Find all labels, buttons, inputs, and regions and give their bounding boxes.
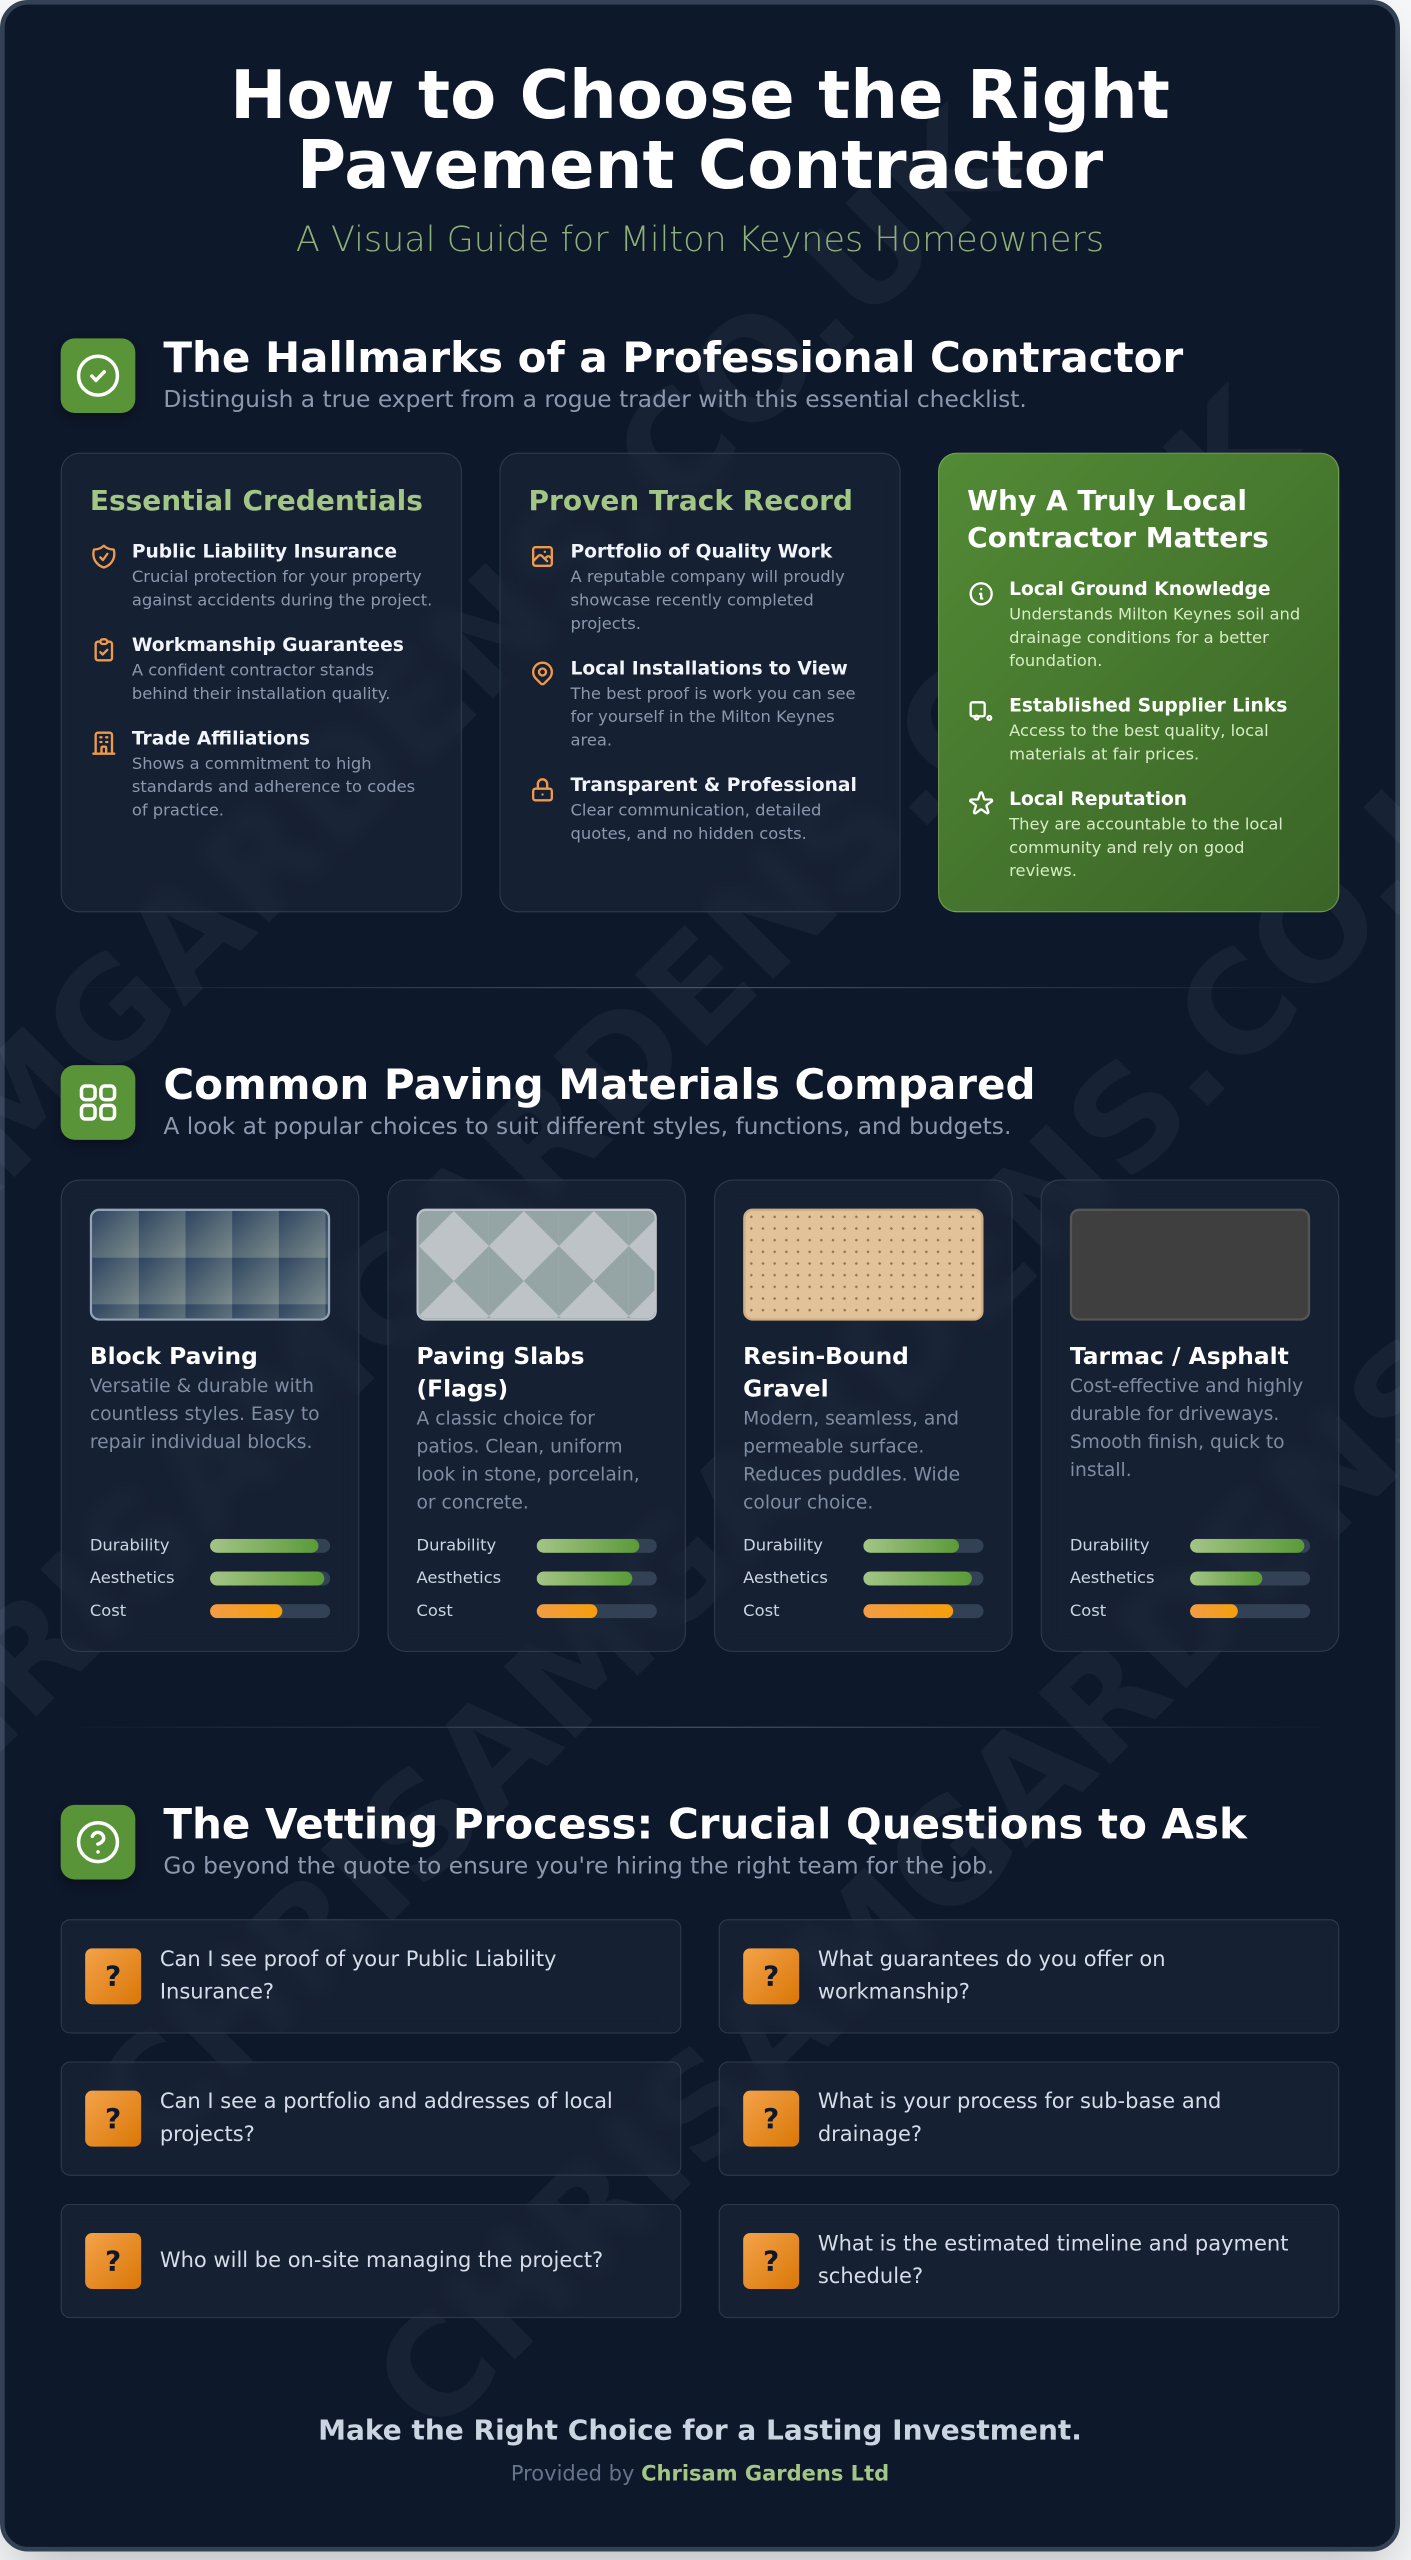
panel: proven track record bbox=[499, 453, 901, 912]
material name: Resin-Bound Gravel bbox=[743, 1342, 909, 1402]
section title text bbox=[163, 1801, 1248, 1879]
item: public liability insurance: Public Liability Insurance bbox=[132, 540, 397, 562]
question card 2: ? bbox=[763, 1960, 779, 1993]
item: transparent and professional: Transparent & Professional bbox=[571, 774, 857, 796]
rating bars bbox=[743, 1537, 984, 1621]
material description: Versatile & durable with countless styles. Easy to repair individual blocks. bbox=[90, 1374, 320, 1453]
rating bars: Aesthetics bbox=[417, 1569, 501, 1588]
rating bars: Aesthetics bbox=[1070, 1569, 1155, 1588]
rating bars: Cost bbox=[743, 1602, 779, 1621]
section title text: Common Paving Materials Compared bbox=[163, 1062, 1036, 1110]
section heading: materials bbox=[60, 1062, 1036, 1144]
swatch: paving slabs bbox=[417, 1209, 657, 1321]
item: local ground knowledge bbox=[970, 578, 1300, 671]
rating bars bbox=[1070, 1537, 1310, 1621]
rating bars: Aesthetics bbox=[743, 1569, 828, 1588]
item: trade affiliations bbox=[92, 727, 415, 820]
material name: Paving Slabs (Flags) bbox=[417, 1342, 585, 1402]
section title text: The Hallmarks of a Professional Contractor bbox=[163, 335, 1183, 383]
question card 2: What guarantees do you offer on workmanship? bbox=[818, 1947, 1166, 2004]
item: local installations to view bbox=[532, 657, 856, 750]
rating bars: Cost bbox=[90, 1602, 126, 1621]
rating bars: Cost bbox=[417, 1602, 453, 1621]
section heading: vetting process bbox=[60, 1801, 1248, 1883]
material name: Block Paving bbox=[90, 1342, 258, 1370]
section title text bbox=[163, 1062, 1036, 1139]
item: established supplier links bbox=[970, 694, 1287, 764]
swatch: block paving bbox=[90, 1209, 330, 1321]
question card 4: What is your process for sub-base and drainage? bbox=[818, 2090, 1221, 2147]
panel heading: Proven Track Record bbox=[529, 484, 853, 517]
item: workmanship guarantees: A confident contractor stands behind their installation quality. bbox=[132, 662, 390, 704]
item: transparent and professional bbox=[532, 774, 857, 844]
question card 5 bbox=[61, 2204, 681, 2318]
item: established supplier links: Access to the best quality, local materials at fair prices. bbox=[1009, 722, 1269, 764]
rating bars: Aesthetics bbox=[90, 1569, 175, 1588]
rating bars: Durability bbox=[1070, 1537, 1150, 1555]
item: trade affiliations: Shows a commitment to high standards and adherence to codes of practice. bbox=[132, 755, 415, 820]
rating bars: Cost bbox=[1070, 1602, 1106, 1621]
title: How to Choose the Right bbox=[230, 56, 1170, 134]
rating bars bbox=[416, 1537, 657, 1621]
question card 3: Can I see a portfolio and addresses of local projects? bbox=[160, 2090, 613, 2147]
section title text bbox=[163, 335, 1184, 412]
panel: tarmac asphalt bbox=[1041, 1180, 1339, 1652]
rating bars: Durability bbox=[90, 1537, 170, 1555]
item: local ground knowledge: Understands Milton Keynes soil and drainage conditions for a better foundation. bbox=[1009, 606, 1300, 671]
question card 6: ? bbox=[763, 2245, 779, 2277]
item: local installations to view: The best proof is work you can see for yourself in the Milton Keynes area. bbox=[571, 685, 856, 750]
item: portfolio of quality work bbox=[532, 540, 845, 634]
question card 6 bbox=[719, 2204, 1339, 2318]
panel: why a truly local contractor matters bbox=[938, 453, 1339, 912]
question card 1: ? bbox=[105, 1960, 121, 1993]
title: Pavement Contractor bbox=[297, 126, 1103, 204]
question card 3 bbox=[61, 2062, 681, 2176]
rating bars bbox=[90, 1537, 330, 1621]
swatch: resin-bound gravel bbox=[743, 1209, 984, 1321]
section heading: hallmarks bbox=[60, 335, 1184, 416]
footer headline: Make the Right Choice for a Lasting Investment. bbox=[318, 2414, 1082, 2447]
section title text: The Vetting Process: Crucial Questions to Ask bbox=[163, 1801, 1247, 1849]
footer credit: Provided by Chrisam Gardens Ltd bbox=[511, 2462, 889, 2486]
item: workmanship guarantees: Workmanship Guarantees bbox=[132, 634, 404, 656]
question card 4: ? bbox=[763, 2102, 779, 2135]
question card 5: ? bbox=[105, 2245, 121, 2277]
material description: A classic choice for patios. Clean, uniform look in stone, porcelain, or concrete. bbox=[417, 1407, 640, 1513]
item: public liability insurance bbox=[92, 540, 432, 610]
panel: block paving bbox=[61, 1180, 359, 1652]
panel heading: Why A Truly Local Contractor Matters bbox=[967, 484, 1269, 554]
section title text: A look at popular choices to suit different styles, functions, and budgets. bbox=[163, 1111, 1011, 1139]
item: local installations to view: Local Installations to View bbox=[571, 657, 848, 679]
question card 6: What is the estimated timeline and payment schedule? bbox=[818, 2232, 1288, 2289]
icon: check circle bbox=[61, 338, 135, 413]
question card 5: Who will be on-site managing the project? bbox=[160, 2248, 603, 2273]
item: portfolio of quality work: Portfolio of Quality Work bbox=[571, 540, 832, 562]
rating bars: Durability bbox=[743, 1537, 823, 1555]
title bbox=[230, 56, 1170, 204]
question card 1 bbox=[61, 1919, 681, 2034]
icon: question circle bbox=[61, 1805, 135, 1880]
panel heading: Essential Credentials bbox=[90, 484, 423, 517]
item: portfolio of quality work: A reputable company will proudly showcase recently completed projects. bbox=[571, 568, 845, 634]
material description: Modern, seamless, and permeable surface. Reduces puddles. Wide colour choice. bbox=[743, 1407, 960, 1513]
item: local reputation: They are accountable to the local community and rely on good reviews. bbox=[1009, 816, 1283, 881]
panel: essential credentials bbox=[61, 453, 462, 912]
question card 3: ? bbox=[105, 2102, 121, 2135]
section title text: Distinguish a true expert from a rogue trader with this essential checklist. bbox=[163, 384, 1027, 412]
panel: resin-bound gravel bbox=[714, 1180, 1013, 1652]
item: public liability insurance: Crucial protection for your property against accidents during the project. bbox=[132, 568, 432, 610]
material name: Tarmac / Asphalt bbox=[1070, 1342, 1289, 1370]
item: local ground knowledge: Local Ground Knowledge bbox=[1009, 578, 1271, 600]
swatch: tarmac bbox=[1070, 1209, 1310, 1321]
question card 4 bbox=[719, 2062, 1339, 2176]
icon: grid bbox=[61, 1065, 135, 1140]
item: local reputation: Local Reputation bbox=[1009, 788, 1187, 810]
rating bars: Durability bbox=[417, 1537, 496, 1555]
section title text: Go beyond the quote to ensure you're hiring the right team for the job. bbox=[163, 1851, 994, 1879]
item: trade affiliations: Trade Affiliations bbox=[132, 727, 310, 749]
question card 1: Can I see proof of your Public Liability Insurance? bbox=[160, 1947, 556, 2004]
item: local reputation bbox=[969, 788, 1283, 881]
item: established supplier links: Established Supplier Links bbox=[1009, 694, 1287, 716]
material description: Cost-effective and highly durable for driveways. Smooth finish, quick to install. bbox=[1070, 1374, 1303, 1481]
question card 2 bbox=[719, 1919, 1339, 2034]
subtitle: A Visual Guide for Milton Keynes Homeowners bbox=[296, 219, 1104, 260]
panel: paving slabs bbox=[387, 1180, 686, 1652]
item: workmanship guarantees bbox=[94, 634, 404, 704]
item: transparent and professional: Clear communication, detailed quotes, and no hidden costs. bbox=[571, 802, 821, 844]
